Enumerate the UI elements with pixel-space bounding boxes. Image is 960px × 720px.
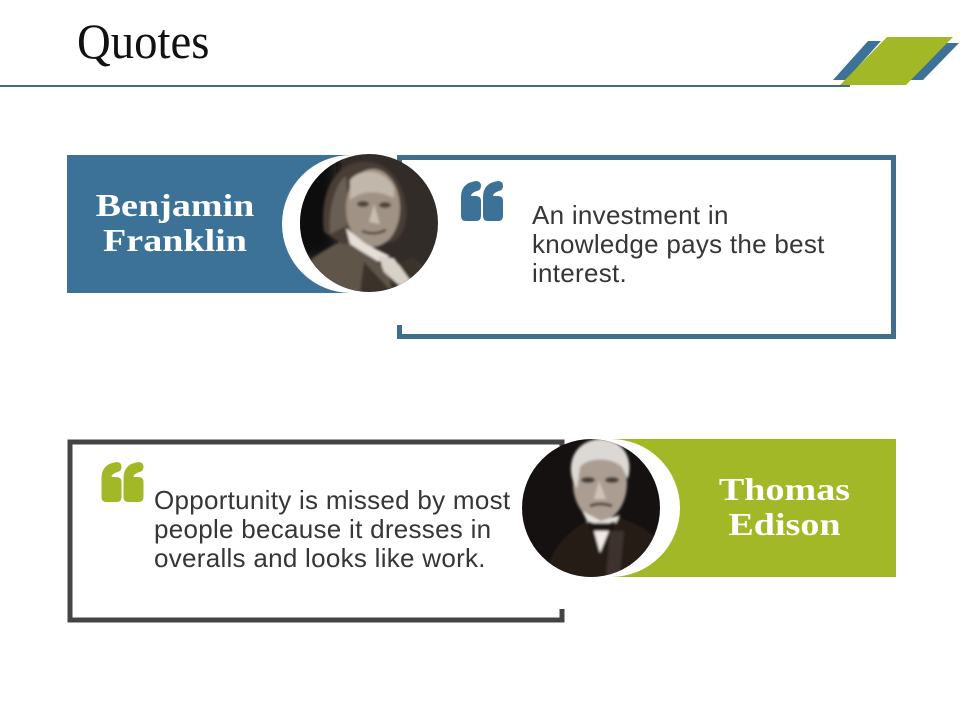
name banner	[612, 439, 896, 577]
white crescent	[542, 439, 680, 577]
quote text: interest.	[532, 258, 627, 288]
quote text: Opportunity is missed by most	[154, 485, 510, 515]
portrait: Franklin	[300, 154, 438, 292]
name label	[96, 187, 254, 258]
quote frame	[68, 440, 564, 622]
title: Quotes	[77, 13, 209, 69]
name banner	[67, 155, 352, 293]
header rule	[0, 85, 850, 87]
quote text	[154, 485, 510, 573]
quote frame	[397, 155, 896, 339]
name label	[719, 471, 850, 542]
quote text: knowledge pays the best	[532, 229, 825, 259]
name label: Franklin	[103, 222, 247, 258]
panel: Thomas Edison	[68, 439, 896, 622]
icon: header parallelograms	[833, 37, 959, 85]
quote text	[532, 200, 825, 288]
icon: opening quote mark	[461, 181, 503, 221]
quote text: An investment in	[532, 200, 729, 230]
icon: opening quote mark	[102, 462, 144, 502]
portrait: Edison	[522, 439, 660, 577]
panel: Benjamin Franklin	[67, 154, 896, 339]
name label: Benjamin	[96, 187, 254, 223]
name label: Edison	[728, 506, 841, 542]
white crescent	[282, 155, 420, 293]
name label: Thomas	[719, 471, 850, 507]
quote text: people because it dresses in	[154, 514, 491, 544]
quote text: overalls and looks like work.	[154, 543, 486, 573]
